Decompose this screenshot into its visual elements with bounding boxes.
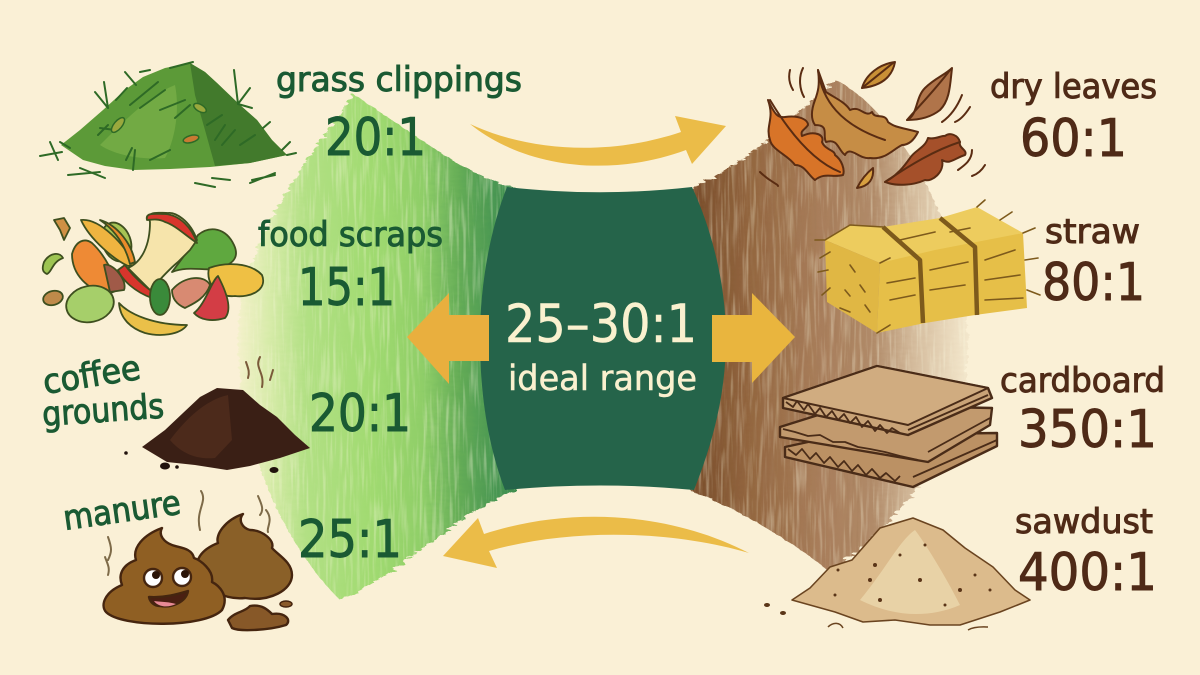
icon: cardboard stack — [780, 366, 997, 487]
arrow: top curved — [470, 116, 726, 166]
label: coffee grounds: grounds — [41, 387, 165, 435]
icon: dry leaves — [760, 62, 985, 188]
arrow: right pointing — [712, 293, 795, 383]
icon: grass pile — [40, 62, 296, 187]
green crayon fill — [238, 94, 515, 600]
label: manure: 25:1 — [298, 510, 402, 570]
label: food scraps: 15:1 — [298, 258, 395, 318]
label: straw — [1042, 212, 1145, 313]
brown crayon fill — [690, 80, 968, 572]
orange leaf — [768, 100, 844, 180]
grass pile seeds — [109, 101, 208, 144]
label: cardboard: cardboard — [1000, 361, 1165, 401]
brown crayon streaks — [690, 82, 945, 566]
icon: sawdust pile — [764, 518, 1030, 630]
label: dry leaves: 60:1 — [1020, 109, 1127, 169]
centre label: 25–30:1 — [505, 294, 697, 355]
bale front — [877, 233, 1027, 333]
icon: coffee pile — [124, 357, 310, 473]
left manure pile — [104, 528, 225, 624]
arrow: bottom curved — [443, 517, 749, 568]
top leaf — [862, 62, 895, 88]
label: food scraps: food scraps — [258, 215, 443, 255]
label: grass clippings: 20:1 — [325, 108, 426, 168]
icon: straw bale — [815, 200, 1040, 333]
tiny leaf — [857, 168, 873, 188]
label: grass clippings — [276, 60, 522, 168]
big leaf — [812, 70, 918, 158]
label: grass clippings: grass clippings — [276, 60, 522, 100]
label: sawdust — [1015, 502, 1157, 603]
label: dry leaves: dry leaves — [990, 67, 1157, 107]
brown funnel — [690, 70, 970, 600]
label: cardboard: 350:1 — [1018, 400, 1157, 460]
centre label — [505, 294, 697, 399]
label: straw: straw — [1045, 212, 1140, 252]
manure face — [144, 568, 191, 606]
green funnel — [230, 80, 520, 610]
right manure pile — [197, 514, 292, 599]
small manure dropping — [228, 606, 288, 630]
label: coffee grounds: coffee — [40, 348, 143, 403]
label: straw: 80:1 — [1042, 253, 1145, 313]
bale end — [825, 240, 880, 333]
cardboard layer 3 — [785, 433, 997, 487]
label: food scraps — [258, 215, 443, 318]
label: dry leaves — [990, 67, 1157, 169]
label: coffee grounds: 20:1 — [309, 384, 411, 444]
label: cardboard — [1000, 361, 1165, 460]
label: sawdust: sawdust — [1015, 502, 1153, 542]
green crayon streaks — [252, 96, 515, 599]
icon: manure — [104, 491, 292, 630]
red oak leaf — [885, 134, 966, 185]
label: manure — [61, 483, 402, 570]
arrow: left pointing — [407, 293, 489, 384]
cardboard layer 2 — [780, 405, 992, 462]
icon: food scraps — [42, 213, 263, 335]
label: manure: manure — [61, 483, 183, 539]
brown oval leaf — [907, 68, 952, 120]
label: sawdust: 400:1 — [1018, 543, 1157, 603]
centre label: ideal range — [508, 359, 697, 399]
ideal range centre panel — [480, 187, 726, 490]
label: coffee grounds — [40, 348, 411, 444]
cardboard layer 1 — [783, 366, 992, 435]
bale top — [825, 207, 1023, 263]
